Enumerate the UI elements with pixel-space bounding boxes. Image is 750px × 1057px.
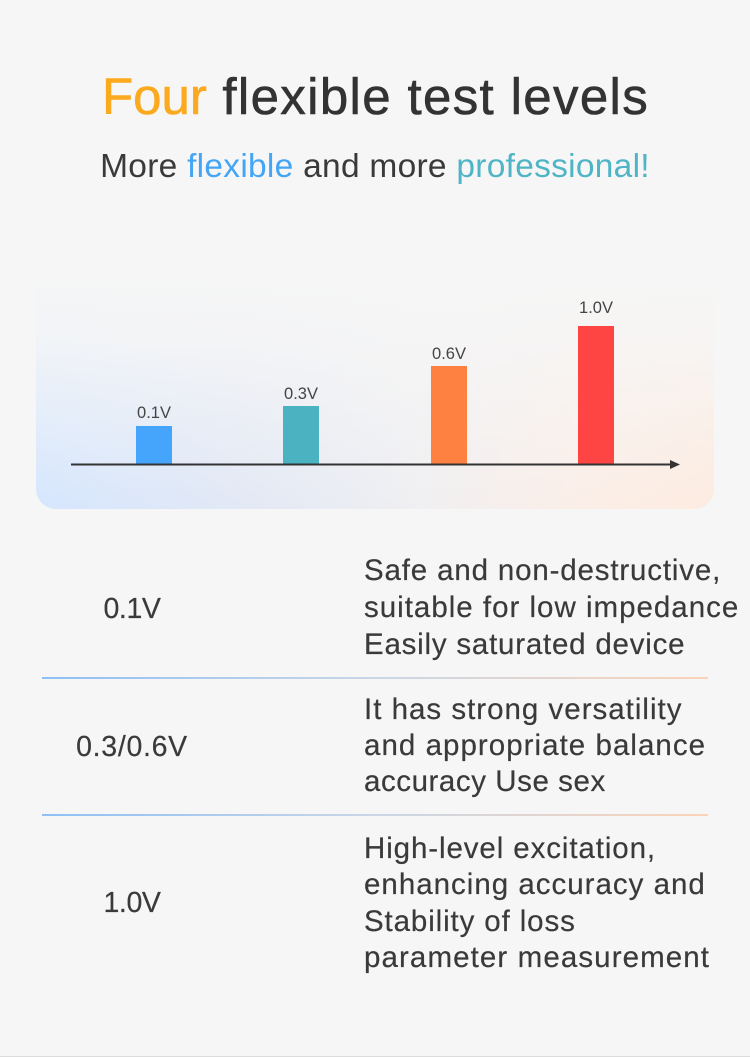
description: 0.3/0.6V: and appropriate balance — [364, 729, 706, 762]
panel: bar chart — [36, 270, 714, 509]
description: 1.0V: Stability of loss — [364, 904, 576, 938]
arrow: axis — [71, 460, 680, 469]
description: 0.1V: Easily saturated device — [364, 628, 685, 661]
description: 0.3/0.6V — [364, 693, 706, 798]
description: 1.0V: High-level excitation, — [364, 832, 656, 864]
description: 1.0V — [364, 832, 710, 974]
bar: 0.1V — [136, 426, 172, 464]
subtitle: More flexible and more professional! — [100, 148, 650, 185]
bar label: 0.6V: 0.6V — [432, 345, 466, 363]
bar: 1.0V — [578, 326, 614, 464]
bar: 0.3V — [283, 406, 319, 464]
label: 1.0V: 1.0V — [103, 887, 161, 919]
label: 0.1V: 0.1V — [103, 593, 161, 625]
title: Four flexible test levels — [102, 68, 649, 125]
description: 1.0V: enhancing accuracy and — [364, 868, 706, 901]
label: 0.3/0.6V: 0.3/0.6V — [76, 731, 188, 763]
panel fade — [36, 270, 714, 509]
description: 0.3/0.6V: It has strong versatility — [364, 693, 682, 726]
description: 0.1V: Safe and non-destructive, — [364, 554, 721, 587]
description: 0.1V — [364, 554, 739, 661]
bar label: 0.3V: 0.3V — [284, 385, 318, 403]
description: 1.0V: parameter measurement — [364, 941, 710, 974]
bar: 0.6V — [431, 366, 467, 464]
bar label: 0.1V: 0.1V — [137, 404, 171, 422]
description: 0.1V: suitable for low impedance — [364, 591, 739, 624]
description: 0.3/0.6V: accuracy Use sex — [364, 765, 606, 798]
bar label: 1.0V: 1.0V — [579, 299, 613, 317]
